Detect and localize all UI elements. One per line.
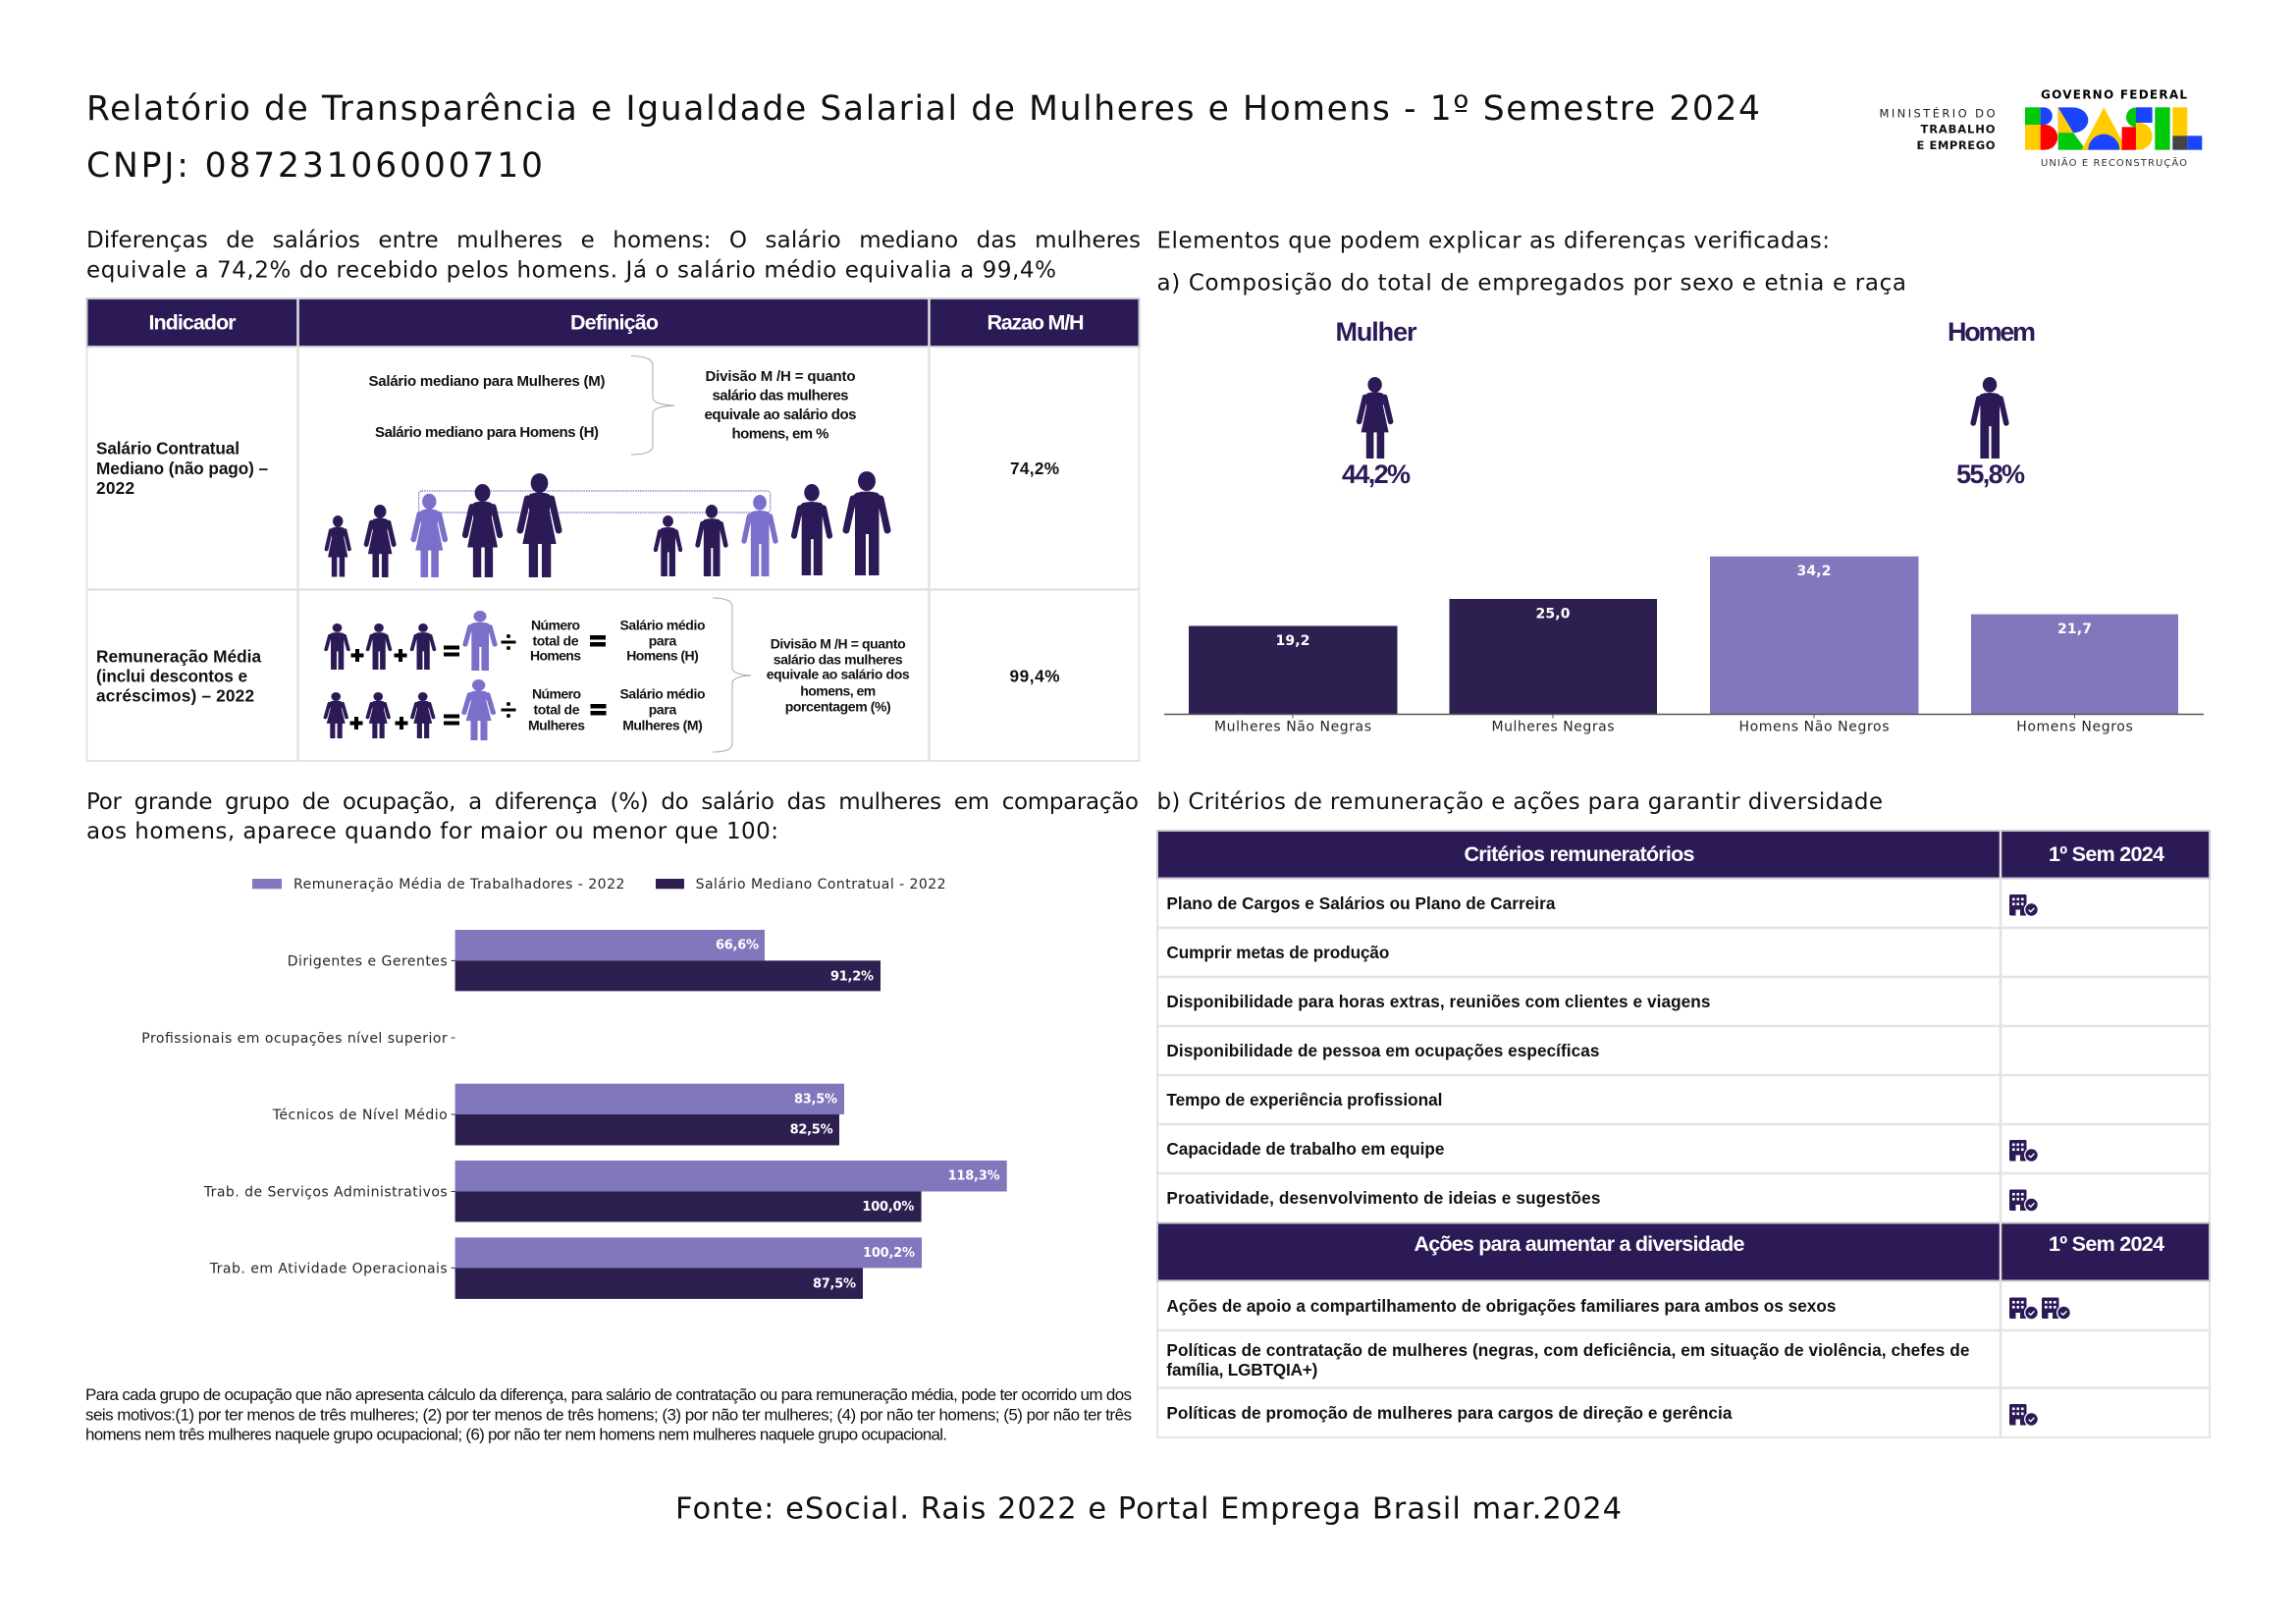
bars: técnicos de nível médio: Técnicos de Nível Médio — [272, 1108, 448, 1123]
value: razão mediana: 74,2% — [1010, 459, 1059, 478]
section text: por grande grupo de ocupação: Por grande grupo de ocupação, a diferença (%) do salário das mulheres em comparação — [86, 789, 1139, 815]
icons: critérios marcados — [2009, 894, 2039, 1212]
row label: remuneração média: acréscimos) – 2022 — [96, 685, 254, 705]
row label: remuneração média: (inclui descontos e — [96, 666, 247, 685]
icon group: fórmula homens: Homens (H) — [626, 648, 699, 664]
icon group: fórmula homens: total de — [532, 632, 579, 648]
rows: ações: Ações de apoio a compartilhamento de obrigações familiares para ambos os sexos — [1166, 1296, 1836, 1316]
definition text: salário mediano: equivale ao salário dos — [705, 406, 856, 423]
bar chart: composição por sexo e raça: Mulheres Não Negras — [1214, 719, 1371, 734]
logo: ministério do trabalho e governo federal — [1879, 88, 2202, 169]
panel: tabela de indicadores — [86, 298, 1140, 761]
definition text: divisão M/H: Divisão M /H = quanto — [771, 636, 906, 652]
definition text: salário mediano: Salário mediano para Homens (H) — [375, 424, 599, 441]
table header: indicador, definição, razão — [149, 310, 1084, 334]
bar chart: composição por sexo e raça: 19,2 — [1276, 633, 1309, 649]
logo: ministério do trabalho e governo federal: GOVERNO FEDERAL — [2041, 88, 2187, 102]
header: critérios remuneratórios: Critérios remuneratórios — [1465, 842, 1695, 866]
panel: homem: 55,8% — [1956, 460, 2025, 489]
bars: atividade operacionais: Trab. em Atividade Operacionais — [209, 1261, 448, 1276]
bars: serviços administrativos — [203, 1161, 1007, 1221]
bars: técnicos de nível médio: 82,5% — [790, 1123, 833, 1138]
row label: salário contratual mediano: 2022 — [96, 478, 134, 498]
section text: elementos que podem explicar — [1156, 229, 1906, 296]
rows: critérios: Capacidade de trabalho em equipe — [1166, 1139, 1444, 1159]
rows: critérios: Tempo de experiência profissional — [1166, 1090, 1442, 1109]
legend: grupo de ocupação — [252, 877, 946, 893]
footnote: homens nem três mulheres naquele grupo ocupacional; (6) por não ter nem homens nem mulheres naquele grupo ocupacional. — [85, 1426, 947, 1443]
rows: critérios — [1166, 893, 1710, 1208]
title: CNPJ: 08723106000710 — [86, 146, 543, 186]
definition text: salário mediano: Salário mediano para Mulheres (M) — [369, 373, 605, 390]
definition text: divisão M/H: porcentagem (%) — [785, 698, 891, 714]
table header: indicador, definição, razão: Definição — [570, 310, 659, 334]
logo: ministério do trabalho e governo federal: UNIÃO E RECONSTRUÇÃO — [2041, 156, 2187, 169]
row label: salário contratual mediano: Mediano (não pago) – — [96, 459, 268, 478]
bars: dirigentes e gerentes — [288, 930, 881, 991]
source footer: Fonte: eSocial. Rais 2022 e Portal Emprega Brasil mar.2024 — [675, 1492, 1622, 1527]
bars: técnicos de nível médio — [272, 1084, 844, 1145]
definition text: salário mediano: Divisão M /H = quanto — [705, 368, 856, 385]
table header: indicador, definição, razão: Indicador — [149, 310, 237, 334]
table header: indicador, definição, razão: Razao M/H — [988, 310, 1084, 334]
rows: ações: Políticas de promoção de mulheres para cargos de direção e gerência — [1166, 1403, 1733, 1423]
bars: técnicos de nível médio: 83,5% — [794, 1093, 837, 1108]
header: ações para aumentar a diversidade: Ações para aumentar a diversidade — [1414, 1232, 1745, 1256]
bars: atividade operacionais: 100,2% — [863, 1246, 915, 1261]
icon group: fórmula mulheres — [325, 679, 705, 740]
definition text: divisão M/H: homens, em — [800, 682, 876, 698]
icon group: fórmula mulheres: Mulheres (M) — [622, 717, 703, 732]
panel: mulher — [1335, 317, 1417, 489]
row label: remuneração média — [96, 646, 261, 705]
intro text: diferenças de salários: Diferenças de salários entre mulheres e homens: O salário mediano das mulheres — [86, 228, 1141, 253]
definition text: divisão M/H: equivale ao salário dos — [767, 667, 910, 682]
bars: dirigentes e gerentes: 66,6% — [716, 939, 759, 952]
definition text: divisão M/H — [713, 598, 910, 752]
icon: homem — [1973, 377, 2006, 459]
header: ações para aumentar a diversidade — [1414, 1232, 2164, 1256]
icon: mulher — [1360, 377, 1391, 459]
definition text: salário mediano: homens, em % — [732, 426, 828, 443]
definition text: salário mediano — [369, 355, 856, 455]
rows: critérios: Cumprir metas de produção — [1166, 943, 1389, 962]
bar chart: composição por sexo e raça — [1164, 557, 2204, 734]
row label: salário contratual mediano — [96, 438, 268, 498]
icon group: fórmula mulheres: total de — [534, 701, 580, 717]
panel: homem: Homem — [1948, 317, 2036, 347]
rows: ações — [1166, 1296, 1969, 1423]
bars: dirigentes e gerentes: Dirigentes e Gerentes — [288, 954, 448, 970]
logo: ministério do trabalho e governo federal: E EMPREGO — [1916, 138, 1996, 152]
panel: mulher: Mulher — [1335, 317, 1417, 347]
icon group: fórmula homens — [326, 611, 705, 671]
bars: serviços administrativos: Trab. de Serviços Administrativos — [203, 1184, 448, 1200]
bar chart: composição por sexo e raça: 34,2 — [1796, 564, 1832, 579]
rows: critérios: Plano de Cargos e Salários ou Plano de Carreira — [1166, 893, 1556, 913]
footnote: Para cada grupo de ocupação que não apresenta cálculo da diferença, para salário de contratação ou para remuneração média, pode ter ocorrido um dos — [85, 1385, 1132, 1404]
intro text: diferenças de salários: equivale a 74,2% do recebido pelos homens. Já o salário médio equivalia a 99,4% — [86, 257, 1056, 283]
header: critérios remuneratórios — [1465, 842, 2164, 866]
icon group: fórmula homens: para — [649, 632, 677, 648]
bar chart: composição por sexo e raça: Mulheres Negras — [1492, 719, 1614, 734]
rows: critérios: Proatividade, desenvolvimento de ideias e sugestões — [1166, 1188, 1600, 1208]
icon group: pessoas ordenadas por salário — [327, 471, 887, 577]
definition text: salário mediano: salário das mulheres — [713, 387, 848, 404]
rows: ações: família, LGBTQIA+) — [1166, 1360, 1317, 1380]
icon group: fórmula mulheres: para — [649, 701, 677, 717]
panel: homem — [1948, 317, 2036, 489]
icon group: fórmula mulheres: Mulheres — [528, 717, 585, 732]
value: razão remuneração: 99,4% — [1009, 666, 1060, 685]
section text: elementos que podem explicar: a) Composição do total de empregados por sexo e etnia e raça — [1156, 270, 1906, 296]
bars: serviços administrativos: 100,0% — [862, 1200, 914, 1215]
icons: ações marcadas — [2009, 1298, 2071, 1427]
legend: grupo de ocupação: Salário Mediano Contratual - 2022 — [696, 877, 946, 893]
intro text: diferenças de salários — [86, 228, 1141, 283]
bars: atividade operacionais: 87,5% — [813, 1276, 856, 1291]
definition text: divisão M/H: salário das mulheres — [774, 652, 903, 668]
icon group: fórmula homens: Homens — [530, 648, 581, 664]
logo: ministério do trabalho e governo federal: MINISTÉRIO DO — [1879, 105, 1995, 120]
bar chart: composição por sexo e raça: 25,0 — [1535, 607, 1571, 622]
legend: grupo de ocupação: Remuneração Média de Trabalhadores - 2022 — [294, 877, 624, 893]
row label: salário contratual mediano: Salário Contratual — [96, 438, 240, 458]
panel: tabela de critérios e ações — [1156, 831, 2211, 1437]
bar chart: composição por sexo e raça: Homens Negros — [2016, 719, 2133, 734]
footnote — [85, 1385, 1132, 1443]
title — [86, 89, 1760, 186]
section text: por grande grupo de ocupação — [86, 789, 1139, 844]
icon group: fórmula mulheres: Número — [532, 686, 581, 702]
title: Relatório de Transparência e Igualdade Salarial de Mulheres e Homens - 1º Semestre 2024 — [86, 89, 1760, 129]
icon group: fórmula homens: Número — [531, 618, 580, 633]
section text: por grande grupo de ocupação: aos homens, aparece quando for maior ou menor que 100: — [86, 819, 778, 844]
row label: remuneração média: Remuneração Média — [96, 646, 261, 666]
rows: critérios: Disponibilidade para horas extras, reuniões com clientes e viagens — [1166, 992, 1710, 1011]
section text: critérios de remuneração: b) Critérios de remuneração e ações para garantir diversidade — [1156, 789, 1883, 815]
bars: dirigentes e gerentes: 91,2% — [830, 969, 874, 984]
bar chart: composição por sexo e raça: 21,7 — [2057, 622, 2092, 637]
icon group: fórmula mulheres: Salário médio — [620, 686, 705, 702]
bars: atividade operacionais — [209, 1237, 922, 1299]
rows: ações: Políticas de contratação de mulheres (negras, com deficiência, em situação de violência, chefes de — [1166, 1340, 1969, 1360]
label: profissionais sem dados: Profissionais em ocupações nível superior — [141, 1031, 448, 1047]
header: critérios remuneratórios: 1º Sem 2024 — [2049, 842, 2164, 866]
icon group: fórmula homens: Salário médio — [620, 618, 705, 633]
bars: serviços administrativos: 118,3% — [948, 1169, 1000, 1184]
rows: critérios: Disponibilidade de pessoa em ocupações específicas — [1166, 1041, 1599, 1060]
section text: elementos que podem explicar: Elementos que podem explicar as diferenças verificadas: — [1156, 229, 1830, 254]
bar chart: composição por sexo e raça: Homens Não Negros — [1739, 719, 1889, 734]
footnote: seis motivos:(1) por ter menos de três mulheres; (2) por ter menos de três homens; (3) por não ter mulheres; (4) por não ter homens; (5) por não ter três — [85, 1406, 1132, 1424]
panel: mulher: 44,2% — [1342, 460, 1411, 489]
header: ações para aumentar a diversidade: 1º Sem 2024 — [2049, 1232, 2164, 1256]
logo: ministério do trabalho e governo federal: TRABALHO — [1920, 123, 1996, 136]
bar chart: grupos de ocupação — [141, 930, 1007, 1299]
